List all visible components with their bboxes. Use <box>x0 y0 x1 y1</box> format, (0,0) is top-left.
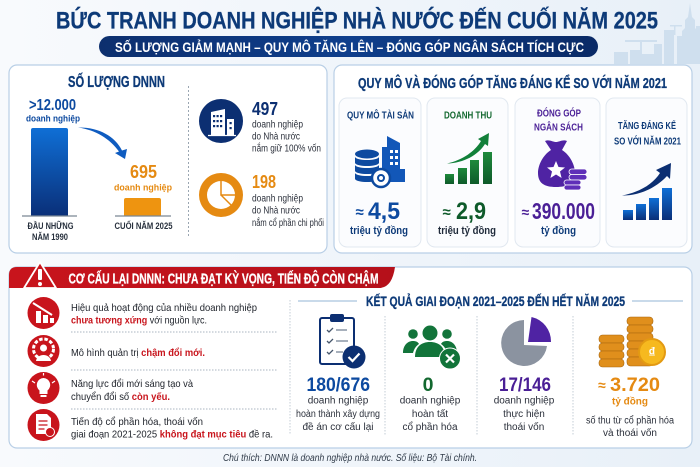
card: đóng góp ngân sách <box>515 98 600 247</box>
icon: database and building <box>355 136 405 187</box>
card: tăng đáng kể <box>606 98 687 247</box>
value: 4,5 <box>356 198 400 225</box>
icon: pie chart <box>199 173 243 217</box>
item: hiệu quả hoạt động <box>28 297 257 329</box>
stat: 198 enterprises: nắm cổ phần chi phối <box>252 216 324 229</box>
card: quy mô tài sản: QUY MÔ TÀI SẢN <box>347 108 414 122</box>
bar label: early 1990s <box>28 221 74 242</box>
subtitle banner: SỐ LƯỢNG GIẢM MẠNH – QUY MÔ TĂNG LÊN – ĐÓNG GÓP NGÂN SÁCH TÍCH CỰC <box>115 40 584 55</box>
icon: warning triangle <box>24 262 56 288</box>
card: đóng góp ngân sách: tỷ đồng <box>541 225 576 237</box>
result: 3.720 tỷ đồng: và thoái vốn <box>603 427 657 439</box>
value: 4,5: ≈ <box>356 204 364 221</box>
panel: số lượng DNNN <box>9 65 327 253</box>
card: đóng góp ngân sách: ĐÓNG GÓP <box>537 106 581 120</box>
icon: light bulb <box>28 372 60 404</box>
icon: document with cross <box>28 409 60 441</box>
value: 390.000: ≈ <box>522 204 530 220</box>
card: tăng đáng kể: SO VỚI NĂM 2021 <box>614 134 681 148</box>
item: năng lực đổi mới: Năng lực đổi mới sáng tạo và <box>71 378 193 390</box>
value: 695 enterprises: doanh nghiệp <box>114 182 172 194</box>
card: doanh thu <box>427 98 508 247</box>
result: 180/676: đề án cơ cấu lại <box>302 421 374 433</box>
value: 2,9: ≈ <box>442 204 451 221</box>
results heading: KẾT QUẢ GIAI ĐOẠN 2021–2025 ĐẾN HẾT NĂM 2025 <box>366 294 625 309</box>
icon: growth chart <box>445 133 492 184</box>
item: hiệu quả hoạt động: Hiệu quả hoạt động của nhiều doanh nghiệp <box>71 302 257 314</box>
bar label: end of 2025: CUỐI NĂM 2025 <box>114 220 172 231</box>
bar label: early 1990s: NĂM 1990 <box>32 232 68 242</box>
value: over 12,000 enterprises: doanh nghiệp <box>26 114 80 124</box>
panel heading: SỐ LƯỢNG DNNN <box>68 73 165 91</box>
value: over 12,000 enterprises <box>26 97 80 124</box>
item: tiến độ cổ phần hóa: Tiến độ cổ phần hóa, thoái vốn <box>71 416 203 428</box>
result: 3.720 tỷ đồng: tỷ đồng <box>612 396 648 408</box>
item: mô hình quản trị: Mô hình quản trị chậm đổi mới. <box>71 347 205 359</box>
icon: pie chart <box>501 317 551 366</box>
arrow: decline <box>78 127 127 159</box>
value: 390.000 <box>522 198 595 224</box>
item: năng lực đổi mới <box>28 372 193 404</box>
result: 180/676: hoàn thành xây dựng <box>296 409 380 420</box>
stat: 497 enterprises: do Nhà nước <box>252 132 300 142</box>
result: 3.720 tỷ đồng: số thu từ cổ phần hóa <box>586 414 674 426</box>
red header banner: CƠ CẤU LẠI DNNN: CHƯA ĐẠT KỲ VỌNG, TIẾN ĐỘ CÒN CHẬM <box>68 270 378 288</box>
stat: 497 enterprises: 497 <box>252 99 278 119</box>
item: tiến độ cổ phần hóa <box>28 409 273 441</box>
value: 2,9: 2,9 <box>456 198 486 225</box>
item: mô hình quản trị <box>28 335 205 367</box>
value: 390.000: 390.000 <box>532 198 595 224</box>
value: 3.720: ≈ <box>598 377 606 393</box>
value: over 12,000 enterprises: >12.000 <box>29 97 76 114</box>
card: tăng đáng kể: TĂNG ĐÁNG KỂ <box>618 119 676 132</box>
value: 3.720: 3.720 <box>610 374 660 396</box>
result: 0: hoàn tất <box>412 408 448 420</box>
icon: gear with person <box>28 335 60 367</box>
result: 0: cổ phần hóa <box>402 421 458 433</box>
result: 180/676 <box>296 314 380 433</box>
card: doanh thu: triệu tỷ đồng <box>438 225 496 237</box>
stat: 497 enterprises: doanh nghiệp <box>252 120 303 130</box>
stat: 198 enterprises <box>252 172 324 229</box>
item: tiến độ cổ phần hóa: giai đoạn 2021-2025 không đạt mục tiêu đề ra. <box>71 428 273 440</box>
result: 3.720 tỷ đồng <box>586 317 674 439</box>
bar: early 1990s <box>31 128 68 216</box>
skyline background <box>614 3 700 64</box>
value: 2,9 <box>442 198 486 225</box>
result: 0: 0 <box>423 374 434 396</box>
value: 695 enterprises <box>114 162 172 194</box>
result: 17/146 <box>494 317 555 433</box>
stat: 497 enterprises: nắm giữ 100% vốn <box>252 142 321 154</box>
card: quy mô tài sản <box>339 98 421 247</box>
icon: rising chart <box>622 163 672 220</box>
icon: people with cross <box>403 326 460 369</box>
bar label: early 1990s: ĐẦU NHỮNG <box>28 221 74 231</box>
subtitle banner <box>99 36 598 57</box>
icon: money bag <box>538 140 587 190</box>
icon: falling chart <box>28 297 60 329</box>
result: 17/146: thoái vốn <box>504 421 544 433</box>
result: 17/146: thực hiện <box>503 409 545 420</box>
card: doanh thu: DOANH THU <box>444 110 492 122</box>
icon: coin stacks: ₫ <box>648 344 656 360</box>
stat: 497 enterprises <box>252 99 321 154</box>
result: 17/146: 17/146 <box>499 374 551 396</box>
value: 4,5: 4,5 <box>368 198 400 225</box>
stat: 198 enterprises: do Nhà nước <box>252 206 300 216</box>
panel: cơ cấu lại DNNN <box>9 262 692 448</box>
card: quy mô tài sản: triệu tỷ đồng <box>350 225 408 237</box>
value: 695 enterprises: 695 <box>130 162 157 182</box>
result: 0: doanh nghiệp <box>400 396 461 406</box>
item: hiệu quả hoạt động: chưa tương xứng với nguồn lực. <box>71 314 207 326</box>
icon: clipboard check <box>320 314 366 368</box>
card: đóng góp ngân sách: NGÂN SÁCH <box>534 120 583 134</box>
result: 180/676: doanh nghiệp <box>308 396 369 406</box>
red header banner <box>9 267 395 288</box>
panel: quy mô và đóng góp <box>334 65 692 253</box>
result: 17/146: doanh nghiệp <box>494 396 555 406</box>
footnote: Chú thích: DNNN là doanh nghiệp nhà nước. Số liệu: Bộ Tài chính. <box>223 452 477 464</box>
result: 0 <box>400 326 461 433</box>
stat: 198 enterprises: 198 <box>252 172 276 192</box>
result: 180/676: 180/676 <box>306 374 370 396</box>
stat: 198 enterprises: doanh nghiệp <box>252 194 303 204</box>
item: năng lực đổi mới: chuyển đổi số còn yếu. <box>71 391 170 403</box>
bar: end of 2025 <box>124 198 161 216</box>
icon: building <box>199 99 243 143</box>
